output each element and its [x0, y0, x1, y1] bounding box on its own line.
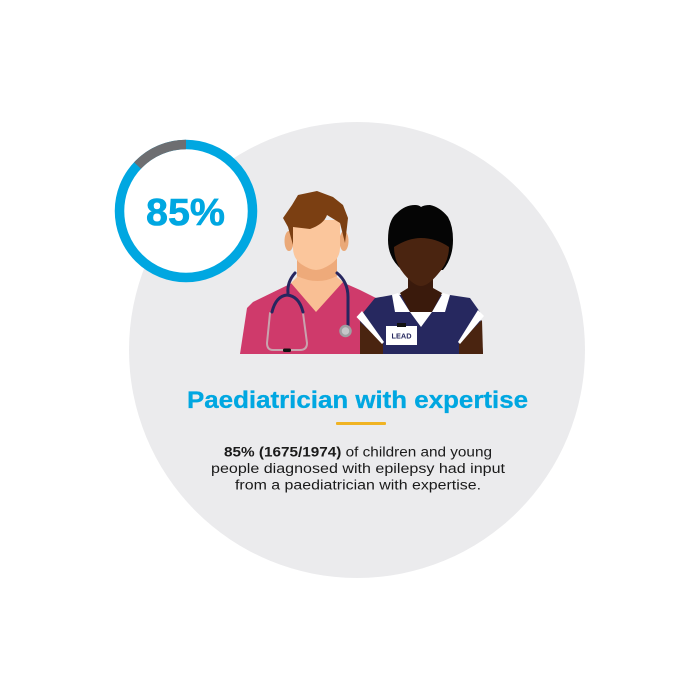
stethoscope: [267, 273, 350, 350]
name badge: [386, 323, 417, 345]
description text: from a paediatrician with expertise.: [235, 478, 481, 492]
description text: [211, 444, 505, 492]
divider accent: [336, 422, 386, 425]
description text: people diagnosed with epilepsy had input: [211, 461, 505, 476]
name badge: LEAD: [392, 334, 412, 340]
background circle panel: [129, 122, 585, 578]
icon: doctor with stethoscope: [240, 191, 384, 354]
description text: 85% (1675/1974) of children and young: [224, 444, 492, 460]
heading: Paediatrician with expertise: [187, 387, 528, 414]
progress ring: 85%: 85%: [146, 192, 225, 234]
progress ring: 85%: [120, 144, 252, 278]
icon: nurse with lead badge: [356, 205, 484, 354]
